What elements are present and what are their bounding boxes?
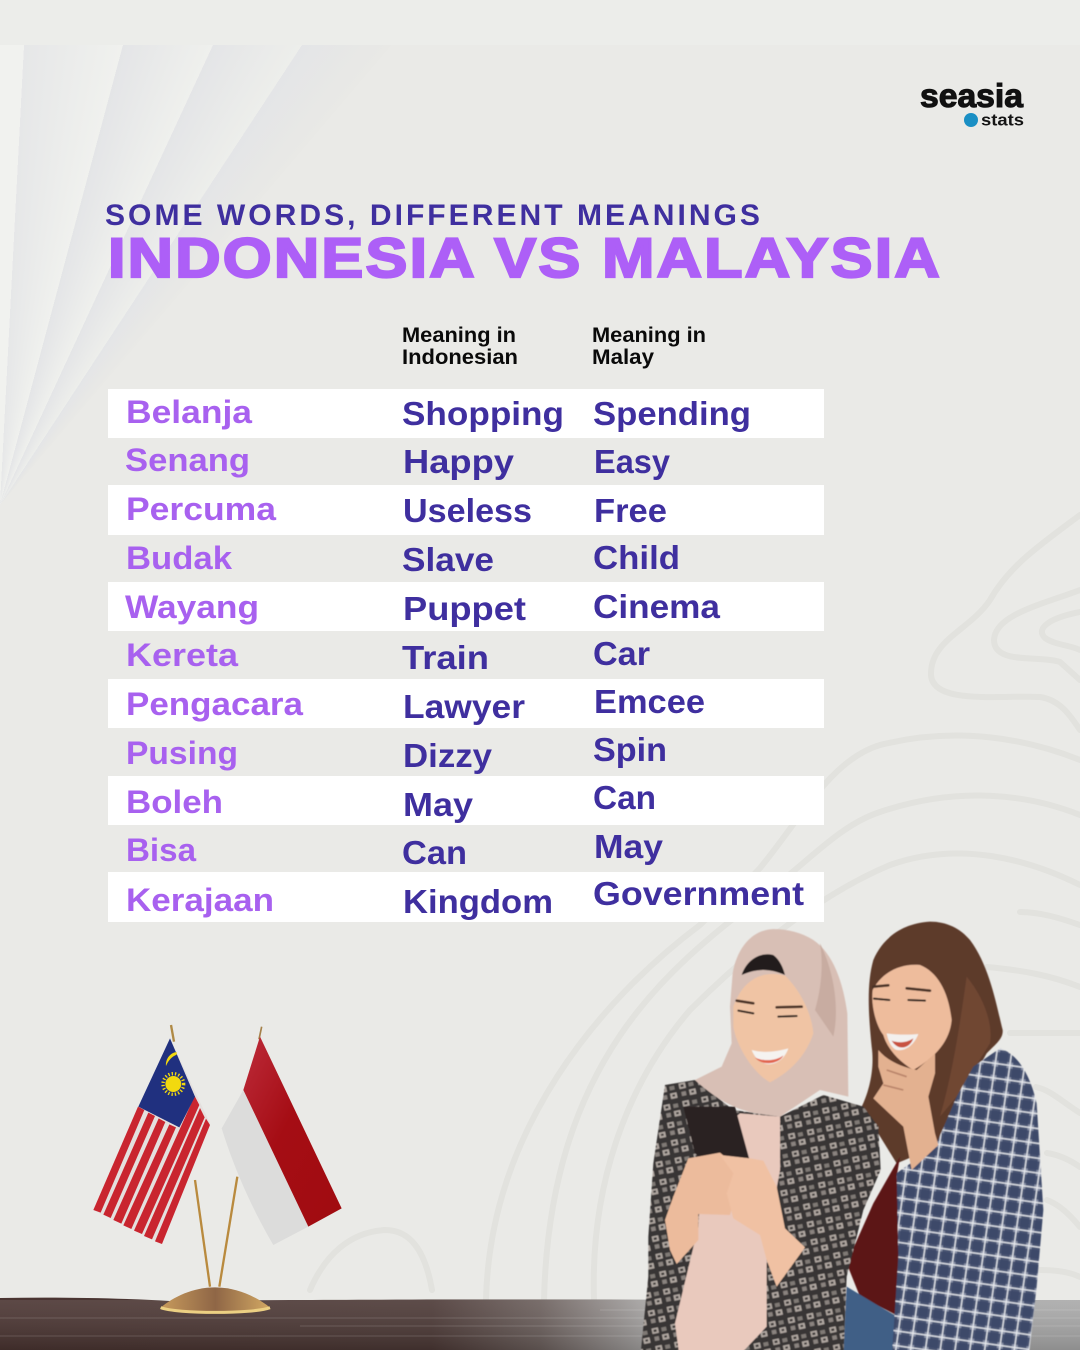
row: Kereta: Kereta <box>126 637 238 673</box>
title: INDONESIA VS MALAYSIA <box>108 226 942 289</box>
row: Pengacara: Emcee <box>594 683 705 720</box>
decorative contour lines <box>310 515 1080 1300</box>
row: Pengacara <box>108 679 824 728</box>
hijab <box>695 929 848 1117</box>
row: Wayang: Wayang <box>125 589 259 625</box>
flag: Indonesia <box>222 1037 342 1245</box>
wooden table <box>0 1298 1080 1350</box>
row: Pengacara: Lawyer <box>403 688 525 725</box>
row: Kerajaan: Government <box>593 875 804 912</box>
row: Senang <box>125 442 671 480</box>
plaid shirt <box>892 1048 1043 1350</box>
row: Pengacara: Pengacara <box>126 686 303 722</box>
logo: seasia stats: stats <box>981 110 1024 130</box>
inner scarf <box>742 954 785 975</box>
row: Belanja <box>108 389 824 438</box>
maroon top <box>847 1157 903 1315</box>
row: Bisa: May <box>594 828 664 865</box>
photo: flags on stand <box>93 1025 342 1312</box>
patterned jacket <box>640 1080 881 1350</box>
hand at chin <box>873 1050 938 1170</box>
row: Bisa <box>126 828 664 871</box>
row: Senang: Senang <box>125 442 250 478</box>
column header: meaning in Malay: Malay <box>592 346 654 369</box>
row: Budak: Budak <box>126 540 232 576</box>
top band <box>0 0 1080 45</box>
row: Budak: Child <box>593 539 680 576</box>
row: Bisa: Bisa <box>126 832 196 868</box>
row: Pusing: Dizzy <box>403 737 493 774</box>
word table <box>108 389 824 922</box>
row: Senang: Happy <box>403 443 515 480</box>
row: Kereta: Train <box>402 639 489 676</box>
column header: meaning in Indonesian: Meaning in <box>402 324 516 347</box>
row: Kereta <box>126 635 650 676</box>
row: Senang: Easy <box>594 443 671 480</box>
photo: two women laughing at phone <box>640 922 1043 1350</box>
hair <box>862 922 1003 1163</box>
logo: seasia stats: seasia <box>920 77 1024 114</box>
row: Pusing: Spin <box>593 731 667 768</box>
flag: Malaysia <box>93 1038 210 1244</box>
row: Boleh: Boleh <box>126 784 223 820</box>
icon: Malaysian crescent <box>166 1052 177 1066</box>
right hand and forearm <box>720 1155 805 1287</box>
row: Boleh: May <box>403 786 474 823</box>
jeans <box>843 1287 897 1350</box>
row: Kereta: Car <box>593 635 650 672</box>
background rays <box>0 45 400 505</box>
row: Budak <box>126 539 680 578</box>
row: Percuma <box>108 485 824 535</box>
row: Boleh: Can <box>593 779 656 816</box>
row: Belanja: Spending <box>593 395 751 432</box>
face <box>872 965 952 1070</box>
row: Kerajaan: Kerajaan <box>126 882 274 918</box>
row: Percuma: Percuma <box>126 491 276 527</box>
row: Wayang: Puppet <box>403 590 526 627</box>
icon: blue globe <box>964 113 978 127</box>
column header: meaning in Indonesian: Indonesian <box>402 346 518 369</box>
phone <box>683 1107 753 1187</box>
face <box>733 974 813 1082</box>
logo: seasia stats <box>920 77 1024 130</box>
left hand and forearm <box>665 1153 737 1264</box>
icon: Malaysian sun <box>165 1076 181 1092</box>
column header: meaning in Malay: Meaning in <box>592 324 706 347</box>
row: Boleh <box>108 776 824 825</box>
row: Pusing: Pusing <box>126 735 238 771</box>
row: Wayang: Cinema <box>593 588 721 625</box>
row: Percuma: Useless <box>403 492 532 529</box>
row: Bisa: Can <box>402 834 467 871</box>
flag stand <box>161 1025 270 1312</box>
row: Budak: Slave <box>402 541 494 578</box>
row: Pusing <box>126 731 667 774</box>
subtitle: SOME WORDS, DIFFERENT MEANINGS <box>105 199 763 232</box>
woman with plaid shirt <box>843 922 1043 1350</box>
row: Wayang <box>108 582 824 631</box>
row: Belanja: Shopping <box>402 395 564 432</box>
row: Percuma: Free <box>594 492 667 529</box>
row: Kerajaan: Kingdom <box>403 883 553 920</box>
woman with hijab <box>640 929 881 1350</box>
row: Belanja: Belanja <box>126 394 252 430</box>
row: Kerajaan <box>108 872 824 922</box>
pink inner top <box>675 1113 780 1350</box>
